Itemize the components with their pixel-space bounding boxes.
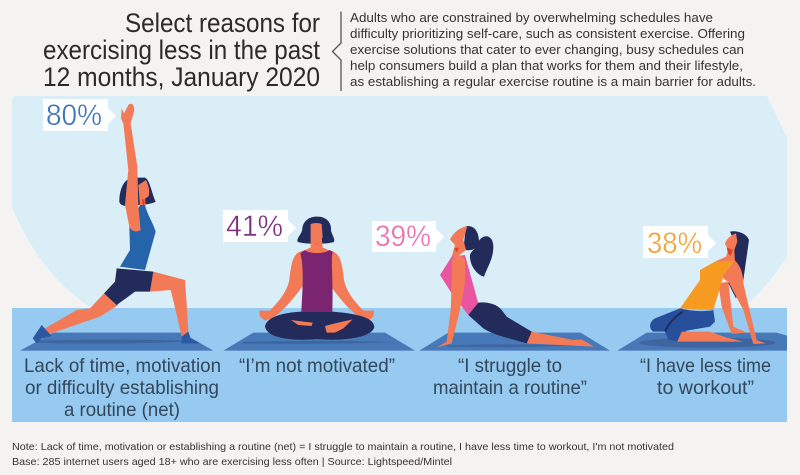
footnote: Note: Lack of time, motivation or establishing a routine (net) = I struggle to maintain a routine, I have less time to workout, I'm not motivated: [12, 442, 674, 453]
intro paragraph: help consumers build a plan that works for them and their lifestyle,: [350, 58, 743, 73]
left arm: [259, 251, 303, 321]
title: [43, 8, 321, 92]
intro paragraph: Adults who are constrained by overwhelming schedules have: [350, 10, 713, 25]
legs: [650, 308, 715, 342]
label: less time: to workout”: [657, 377, 754, 399]
label: lack of time net: Lack of time, motivation: [24, 355, 221, 377]
face: [311, 223, 323, 245]
intro paragraph: [350, 10, 756, 89]
label: not motivated: “I’m not motivated”: [239, 355, 395, 377]
sky backdrop: [12, 96, 787, 308]
shoes: [33, 325, 200, 343]
tank top: [440, 255, 478, 315]
lower leg: [527, 332, 594, 347]
figure 2: seated meditation: [223, 217, 415, 351]
title: Select reasons for: [125, 8, 320, 38]
intro paragraph: exercise solutions that cater to ever changing, busy schedules can: [350, 42, 744, 57]
label: less time: “I have less time: [640, 355, 771, 377]
feet: [291, 319, 353, 333]
hair: [119, 178, 156, 206]
floor: [12, 308, 787, 422]
intro paragraph: difficulty prioritizing self-care, such as consistent exercise. Offering: [350, 26, 745, 41]
face and neck: [450, 226, 467, 257]
yoga mat 2: [223, 333, 415, 351]
tank top: [680, 261, 735, 310]
title: exercising less in the past: [43, 35, 321, 65]
crossed legs: [265, 312, 374, 340]
figure 1: lunge: [20, 104, 213, 351]
shorts: [104, 268, 153, 305]
yoga mat 1: [20, 333, 213, 351]
callout 80%: 80%: [46, 99, 102, 132]
face and neck: [715, 233, 737, 262]
callout 39%: 39%: [375, 220, 431, 253]
face and neck: [138, 180, 149, 212]
hair: [297, 217, 334, 244]
figure 3: upward dog: [419, 226, 610, 351]
label: struggle routine: maintain a routine”: [433, 377, 587, 399]
label: less time: [640, 355, 771, 399]
label: lack of time net: [24, 355, 221, 421]
label: struggle routine: “I struggle to: [458, 355, 562, 377]
neck and shoulders: [302, 237, 332, 258]
right arm: [330, 251, 374, 321]
hair: [728, 231, 749, 298]
back leg: [45, 293, 118, 335]
raised arm: [121, 104, 141, 231]
callout 38%: 38%: [647, 227, 702, 260]
callout 41%: 41%: [226, 210, 283, 243]
leggings: [468, 302, 532, 343]
footnote: Base: 285 internet users aged 18+ who are exercising less often | Source: Lightspeed/Mintel: [12, 457, 452, 468]
shin and foot: [677, 332, 743, 342]
title: 12 months, January 2020: [43, 62, 320, 92]
label: struggle routine: [433, 355, 587, 399]
front leg: [150, 272, 189, 337]
label: lack of time net: a routine (net): [64, 399, 180, 421]
yoga mat 3: [419, 333, 610, 351]
yoga mat 4: [617, 333, 787, 351]
footnote: [12, 442, 674, 468]
intro paragraph: as establishing a regular exercise routine is a main barrier for adults.: [350, 74, 756, 89]
label: lack of time net: or difficulty establishing: [25, 377, 219, 399]
ponytail and hair: [463, 226, 493, 277]
figure 4: kneeling back bend: [617, 231, 787, 351]
back arm: [718, 282, 747, 334]
bracket divider: [332, 12, 341, 91]
arm: [437, 256, 465, 347]
tank top: [120, 205, 156, 270]
tank top: [300, 250, 333, 312]
front arm: [723, 261, 766, 344]
